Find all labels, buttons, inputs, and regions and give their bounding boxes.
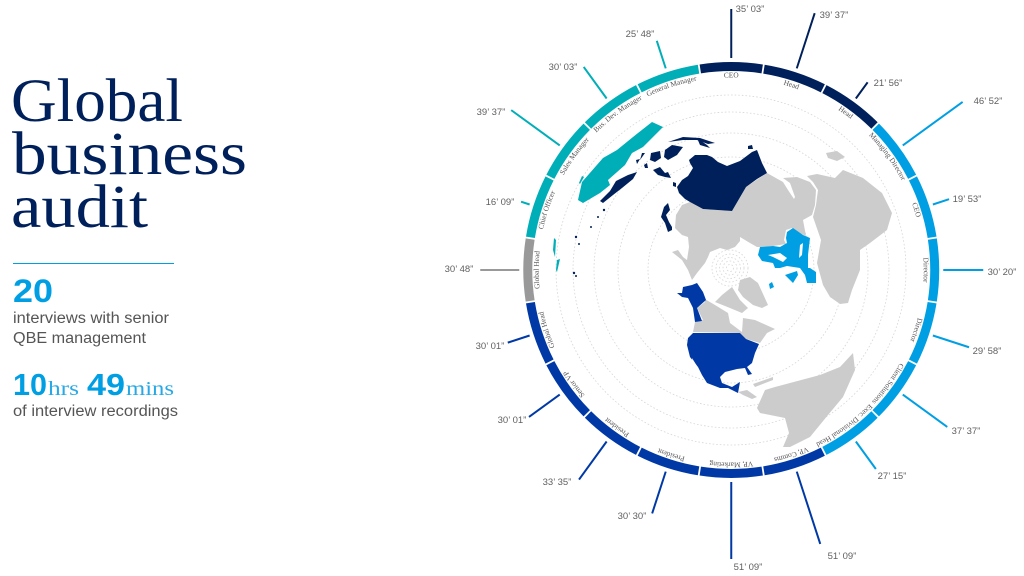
segment: President 1: 30’ 30” xyxy=(618,511,646,522)
stat: recordings xyxy=(13,367,178,420)
segment: Director 1: 30’ 20” xyxy=(988,267,1016,278)
segment: Sales Manager: Sales Manager xyxy=(560,138,589,175)
stat: interviews xyxy=(13,273,169,347)
map: navy region xyxy=(573,137,767,277)
segment: Head 2 xyxy=(822,78,902,129)
panel: summary column xyxy=(11,68,247,420)
segment: General Manager xyxy=(626,29,700,96)
map: teal region xyxy=(553,122,663,272)
world map xyxy=(553,122,892,447)
ring chart with interview durations xyxy=(445,4,1016,573)
segment: Sales Manager xyxy=(477,107,590,179)
segment: Exec. Divisional Head xyxy=(816,404,906,482)
segment: Bus. Dev. Manager: Bus. Dev. Manager xyxy=(593,96,642,132)
segment: Global Head 2: 30’ 48” xyxy=(445,264,473,275)
segment: CEO xyxy=(700,4,764,78)
segment: Chief Officer: Chief Officer xyxy=(538,190,555,229)
segment: Client Solutions: 37’ 37” xyxy=(952,426,980,437)
segment: General Manager: 25’ 48” xyxy=(626,29,654,40)
segment: Sales Manager: 39’ 37” xyxy=(477,107,505,118)
segment: Head 2: Head xyxy=(838,106,854,119)
stat: recordings: 10 xyxy=(13,367,47,402)
segment: Senior VP: 30’ 01” xyxy=(498,415,526,426)
segment: VP, Marketing: VP, Marketing xyxy=(710,460,754,468)
segment: Head 1 xyxy=(763,10,848,92)
stat: recordings: hrs xyxy=(48,378,79,400)
segment: Global Head 1 xyxy=(476,302,554,364)
segment: Chief Officer: 16’ 09” xyxy=(486,197,514,208)
stat: recordings: of interview recordings xyxy=(13,403,178,420)
segment: VP, Marketing xyxy=(700,460,763,573)
segment: Exec. Divisional Head: Exec. Divisional Head xyxy=(816,404,873,448)
segment: Bus. Dev. Manager xyxy=(549,62,642,132)
segment: Exec. Divisional Head: 27’ 15” xyxy=(878,471,906,482)
segment: Senior VP xyxy=(498,361,590,426)
segment: Global Head 2 xyxy=(445,238,540,302)
segment: Bus. Dev. Manager: 30’ 03” xyxy=(549,62,577,73)
segment: President 1: President xyxy=(658,448,685,462)
segment: Director 2 xyxy=(909,302,1001,364)
stat: interviews: interviews with senior xyxy=(13,310,169,327)
segment: Director 2: Director xyxy=(910,318,922,342)
segment: VP, Marketing: 51’ 09” xyxy=(734,562,762,573)
segment: CEO: CEO xyxy=(724,72,738,78)
map: light blue region xyxy=(758,228,820,289)
segment: President 2 xyxy=(543,411,640,488)
segment: Managing Director: 46’ 52” xyxy=(974,96,1002,107)
segment: President 2: President xyxy=(605,417,630,438)
segment: General Manager: General Manager xyxy=(646,77,696,96)
segment: Head 2: 21’ 56” xyxy=(874,78,902,89)
segment: Senior VP: Senior VP xyxy=(564,372,584,398)
segment: Global Head 1: 30’ 01” xyxy=(476,341,504,352)
segment: Global Head 2: Global Head xyxy=(534,251,540,289)
segment: VP, Comms: 51’ 09” xyxy=(828,551,856,562)
segment: Head 1: 39’ 37” xyxy=(820,10,848,21)
segment: CEO 2: 19’ 53” xyxy=(953,194,981,205)
stat: interviews: QBE management xyxy=(13,330,147,347)
title: Global xyxy=(11,68,183,135)
segment: President 1 xyxy=(618,448,700,522)
title: audit xyxy=(11,174,148,241)
map: grey land xyxy=(672,151,892,447)
stat: recordings: 49 xyxy=(87,367,125,402)
segment: Client Solutions xyxy=(872,361,980,437)
title xyxy=(11,68,247,241)
segment: Director 2: 29’ 58” xyxy=(973,346,1001,357)
stat: interviews: 20 xyxy=(13,273,53,309)
segment: Global Head 1: Global Head xyxy=(538,312,554,348)
segment: Managing Director xyxy=(869,96,1002,180)
segment: Chief Officer xyxy=(486,176,555,238)
title: business xyxy=(12,121,247,188)
segment: Client Solutions: Client Solutions xyxy=(872,364,904,404)
segment: CEO: 35’ 03” xyxy=(736,4,764,15)
segment: CEO 2: CEO xyxy=(912,202,921,217)
segment: Head 1: Head xyxy=(784,80,800,90)
stat: recordings: mins xyxy=(126,378,174,400)
segment: CEO 2 xyxy=(909,176,981,238)
segment: Director 1: Director xyxy=(923,258,928,282)
segment: VP, Comms xyxy=(763,448,856,562)
segment: President 2: 33’ 35” xyxy=(543,477,571,488)
segment: Director 1 xyxy=(923,238,1016,302)
map: blue region xyxy=(677,283,759,393)
segment: Managing Director: Managing Director xyxy=(869,132,905,180)
segment: VP, Comms: VP, Comms xyxy=(774,448,810,461)
